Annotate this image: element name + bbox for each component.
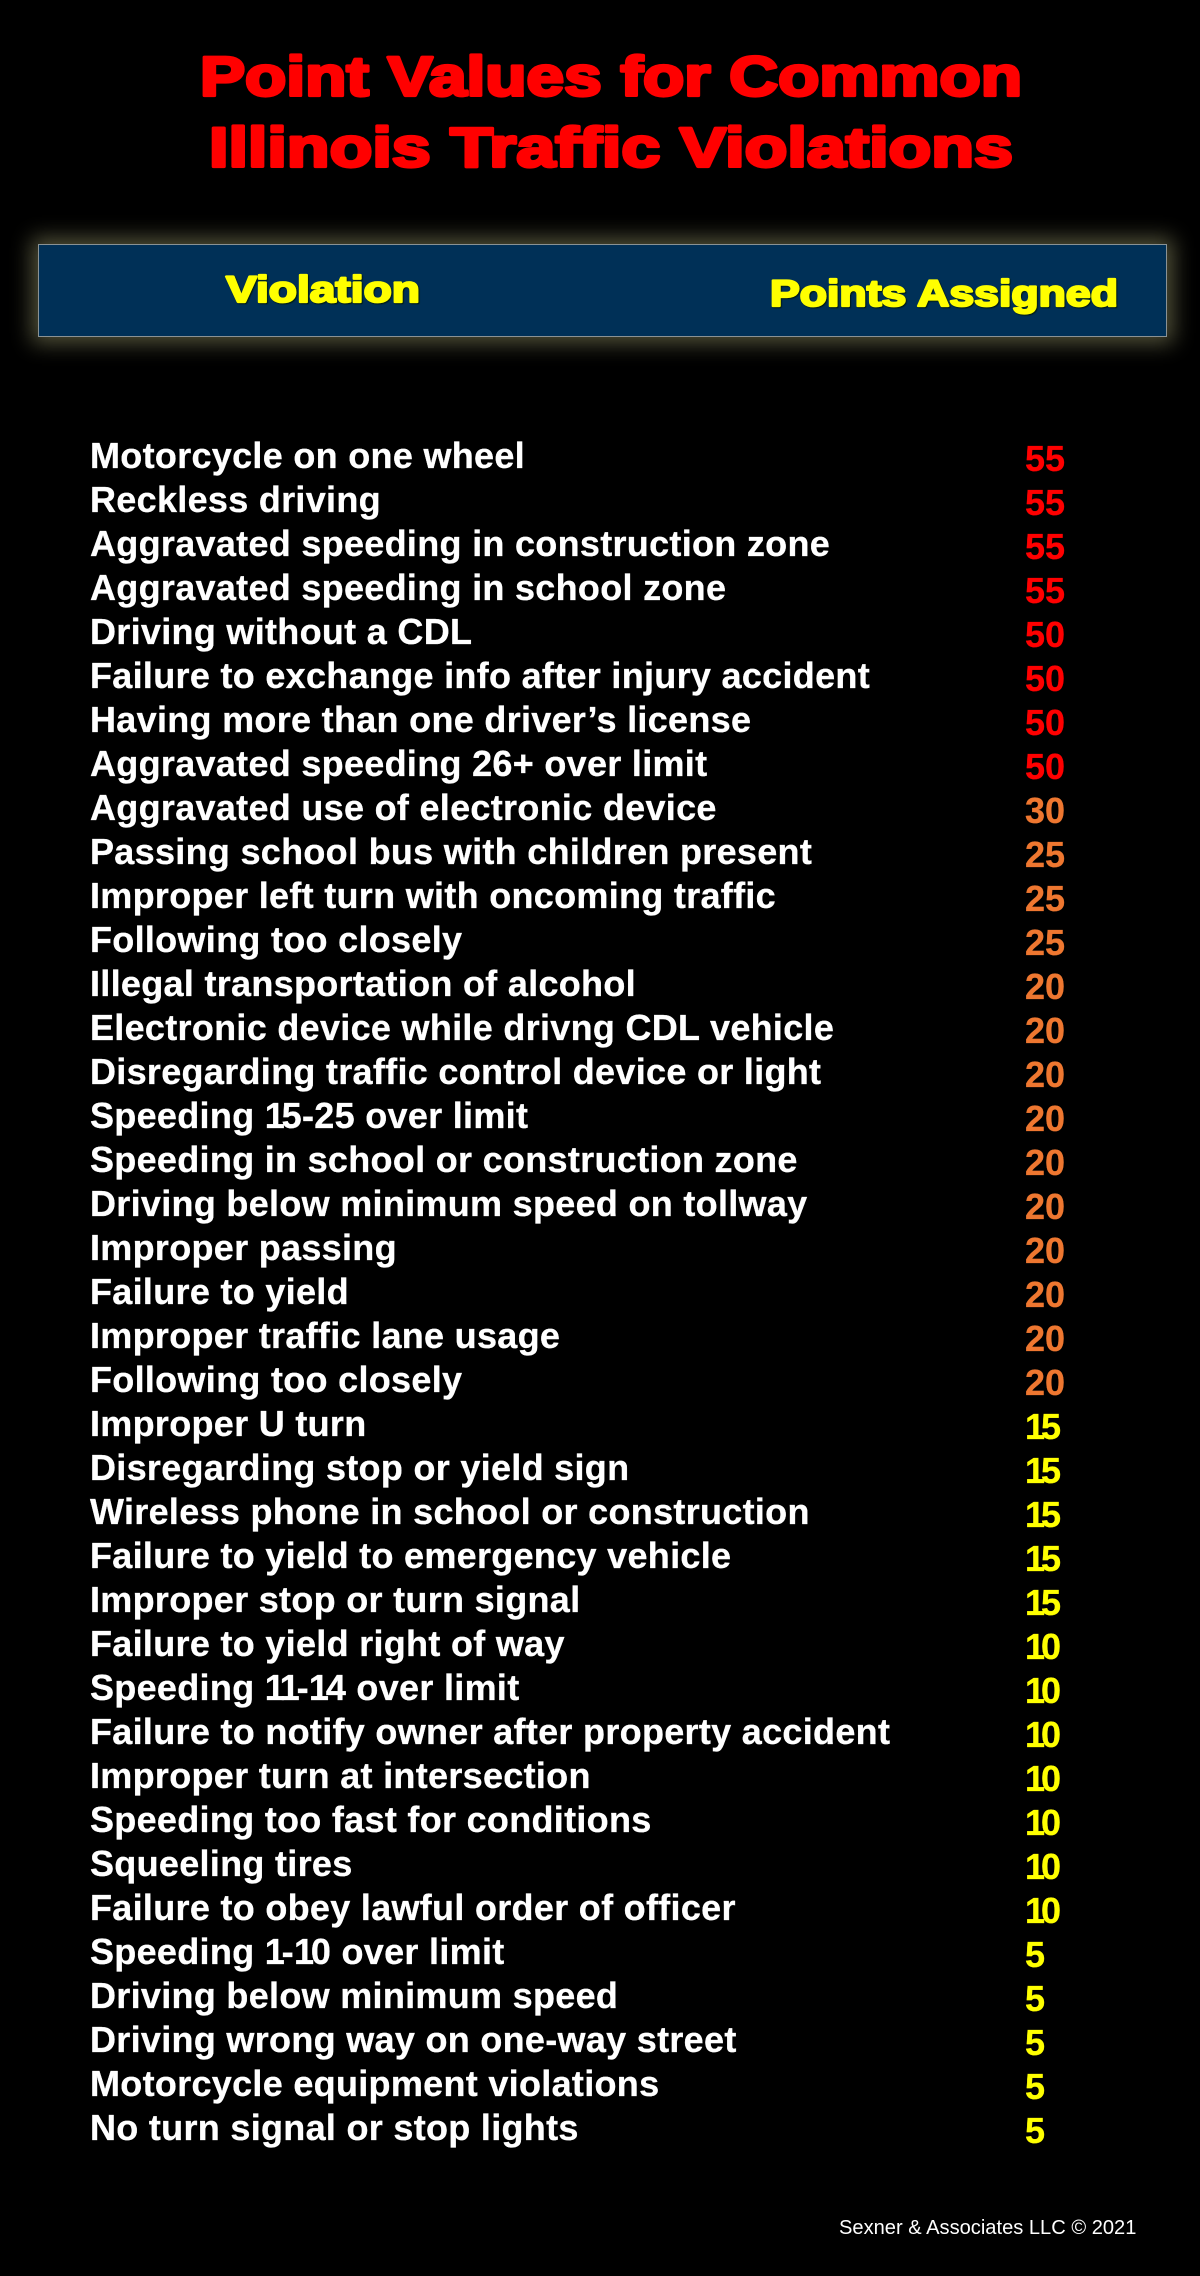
- row: 50 points: 50: [1025, 614, 1065, 655]
- row: 10 points: [90, 1887, 1061, 1931]
- row: 15 points: Disregarding stop or yield sign: [90, 1447, 629, 1488]
- row: 10 points: 10: [1025, 1802, 1061, 1843]
- row: 20 points: [90, 1051, 1065, 1095]
- row: 10 points: Failure to notify owner after property accident: [90, 1711, 890, 1752]
- row: 20 points: [90, 1359, 1065, 1403]
- row: 55 points: [90, 435, 1065, 479]
- row: 10 points: 10: [1025, 1626, 1061, 1667]
- row: 15 points: Wireless phone in school or construction: [90, 1491, 810, 1532]
- row: 5 points: Driving wrong way on one-way street: [90, 2019, 737, 2060]
- row: 25 points: [90, 919, 1065, 963]
- copyright footer: Sexner & Associates LLC © 2021: [839, 2217, 1136, 2239]
- row: 15 points: Improper stop or turn signal: [90, 1579, 580, 1620]
- heading: violation column: Violation: [226, 269, 420, 310]
- row: 20 points: Disregarding traffic control device or light: [90, 1051, 821, 1092]
- row: 5 points: [0, 2062, 1200, 2106]
- row: 10 points: Improper turn at intersection: [90, 1755, 591, 1796]
- row: 25 points: 25: [1025, 922, 1065, 963]
- row: 50 points: Having more than one driver’s license: [90, 699, 751, 740]
- row: 10 points: Squeeling tires: [90, 1843, 353, 1884]
- row: 15 points: 15: [1025, 1494, 1061, 1535]
- row: 50 points: [90, 699, 1065, 743]
- row: 55 points: [90, 479, 1065, 523]
- row: 55 points: Aggravated speeding in school zone: [90, 567, 726, 608]
- row: 20 points: 20: [1025, 1186, 1065, 1227]
- row: 50 points: [90, 743, 1065, 787]
- row: 5 points: 5: [1025, 2110, 1045, 2151]
- row: 5 points: Driving below minimum speed: [90, 1975, 618, 2016]
- heading: points column: Points Assigned: [770, 273, 1118, 314]
- row: 10 points: Speeding too fast for conditions: [90, 1799, 652, 1840]
- title: [200, 44, 1022, 178]
- row: 20 points: 20: [1025, 1318, 1065, 1359]
- row: 10 points: Failure to obey lawful order of officer: [90, 1887, 736, 1928]
- row: 15 points: 15: [1025, 1450, 1061, 1491]
- row: 55 points: Motorcycle on one wheel: [90, 435, 525, 476]
- row: 20 points: [90, 1227, 1065, 1271]
- row: 20 points: [90, 1139, 1065, 1183]
- row: 25 points: Passing school bus with children present: [90, 831, 812, 872]
- row: 10 points: [90, 1843, 1061, 1887]
- row: 55 points: Reckless driving: [90, 479, 381, 520]
- row: 50 points: Failure to exchange info after injury accident: [90, 655, 870, 696]
- row: 25 points: Improper left turn with oncoming traffic: [90, 875, 776, 916]
- row: 50 points: Driving without a CDL: [90, 611, 472, 652]
- row: 20 points: [90, 1183, 1065, 1227]
- row: 25 points: Following too closely: [90, 919, 462, 960]
- row: 20 points: Electronic device while drivng CDL vehicle: [90, 1007, 834, 1048]
- row: 55 points: 55: [1025, 570, 1065, 611]
- row: 10 points: Failure to yield right of way: [90, 1623, 565, 1664]
- row: 15 points: Improper U turn: [90, 1403, 367, 1444]
- row: 30 points: [90, 787, 1065, 831]
- row: 25 points: 25: [1025, 834, 1065, 875]
- row: 20 points: Failure to yield: [90, 1271, 349, 1312]
- row: 15 points: [90, 1447, 1061, 1491]
- row: 20 points: Improper traffic lane usage: [90, 1315, 560, 1356]
- row: 50 points: Aggravated speeding 26+ over limit: [90, 743, 707, 784]
- row: 20 points: Illegal transportation of alcohol: [90, 963, 636, 1004]
- row: 20 points: 20: [1025, 1230, 1065, 1271]
- row: 50 points: [90, 611, 1065, 655]
- row: 10 points: [90, 1799, 1061, 1843]
- row: 25 points: [90, 875, 1065, 919]
- row: 5 points: No turn signal or stop lights: [90, 2107, 579, 2148]
- row: 20 points: 20: [1025, 1362, 1065, 1403]
- row: 30 points: Aggravated use of electronic device: [90, 787, 717, 828]
- row: 20 points: Speeding in school or construction zone: [90, 1139, 798, 1180]
- row: 55 points: [90, 567, 1065, 611]
- row: 20 points: Following too closely: [90, 1359, 462, 1400]
- row: 20 points: 20: [1025, 1142, 1065, 1183]
- row: 5 points: [0, 2106, 1200, 2150]
- row: 5 points: 5: [1025, 1978, 1045, 2019]
- row: 20 points: 20: [1025, 966, 1065, 1007]
- row: 5 points: Speeding 1-10 over limit: [90, 1931, 505, 1972]
- row: 15 points: 15: [1025, 1582, 1061, 1623]
- row: 10 points: 10: [1025, 1846, 1061, 1887]
- row: 15 points: [90, 1403, 1061, 1447]
- row: 20 points: Improper passing: [90, 1227, 397, 1268]
- row: 10 points: 10: [1025, 1758, 1061, 1799]
- row: 5 points: [90, 2019, 1045, 2063]
- title: Illinois Traffic Violations: [209, 116, 1013, 178]
- row: 20 points: 20: [1025, 1054, 1065, 1095]
- row: 20 points: [90, 1095, 1065, 1139]
- row: 5 points: [90, 1931, 1045, 1975]
- row: 5 points: 5: [1025, 2066, 1045, 2107]
- row: 10 points: 10: [1025, 1670, 1061, 1711]
- panel: table header: [38, 244, 1167, 337]
- row: 5 points: 5: [1025, 2022, 1045, 2063]
- row: 15 points: [90, 1579, 1061, 1623]
- row: 50 points: 50: [1025, 746, 1065, 787]
- row: 15 points: [90, 1491, 1061, 1535]
- row: 55 points: Aggravated speeding in construction zone: [90, 523, 830, 564]
- row: 55 points: 55: [1025, 482, 1065, 523]
- row: 55 points: 55: [1025, 438, 1065, 479]
- row: 20 points: Speeding 15-25 over limit: [90, 1095, 528, 1136]
- table header labels: [224, 269, 1118, 316]
- row: 15 points: 15: [1025, 1406, 1061, 1447]
- row: 20 points: 20: [1025, 1010, 1065, 1051]
- row: 20 points: Driving below minimum speed on tollway: [90, 1183, 808, 1224]
- row: 55 points: 55: [1025, 526, 1065, 567]
- row: 20 points: 20: [1025, 1274, 1065, 1315]
- row: 50 points: 50: [1025, 658, 1065, 699]
- row: 10 points: [90, 1667, 1061, 1711]
- row: 50 points: 50: [1025, 702, 1065, 743]
- row: 10 points: [90, 1623, 1061, 1667]
- row: 10 points: 10: [1025, 1890, 1061, 1931]
- row: 10 points: 10: [1025, 1714, 1061, 1755]
- row: 15 points: 15: [1025, 1538, 1061, 1579]
- row: 5 points: Motorcycle equipment violations: [90, 2063, 659, 2104]
- row: 30 points: 30: [1025, 790, 1065, 831]
- table of violations and points: [90, 435, 1065, 2151]
- row: 20 points: [90, 1271, 1065, 1315]
- row: 10 points: [90, 1755, 1061, 1799]
- row: 10 points: Speeding 11-14 over limit: [90, 1667, 520, 1708]
- row: 20 points: [90, 963, 1065, 1007]
- row: 25 points: [90, 831, 1065, 875]
- title: Point Values for Common: [200, 44, 1022, 108]
- row: 5 points: 5: [1025, 1934, 1045, 1975]
- row: 20 points: [90, 1315, 1065, 1359]
- row: 15 points: [90, 1535, 1061, 1579]
- row: 25 points: 25: [1025, 878, 1065, 919]
- row: 5 points: [90, 1975, 1045, 2019]
- row: 15 points: Failure to yield to emergency vehicle: [90, 1535, 731, 1576]
- row: 20 points: 20: [1025, 1098, 1065, 1139]
